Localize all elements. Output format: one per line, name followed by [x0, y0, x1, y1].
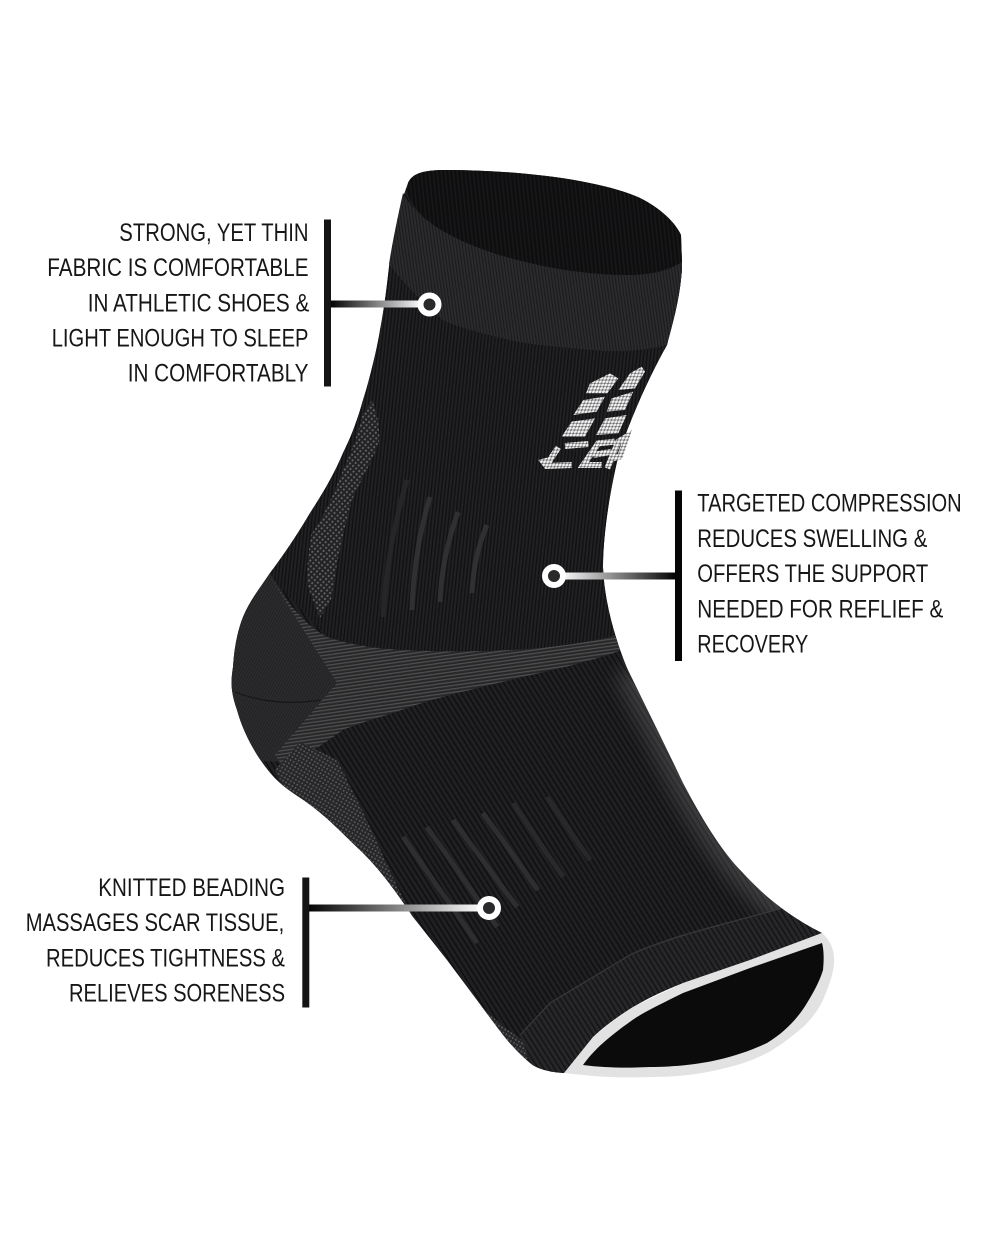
callout connector	[560, 572, 675, 580]
callout text: REDUCES SWELLING &	[697, 525, 928, 553]
toe opening white rim	[564, 933, 834, 1077]
callout text: IN ATHLETIC SHOES &	[88, 290, 310, 318]
callout: targeted compression	[545, 490, 962, 661]
callout text: IN COMFORTABLY	[128, 360, 309, 388]
callout text: KNITTED BEADING	[98, 874, 285, 902]
toe seam	[520, 908, 783, 1035]
speckled sole edge	[275, 742, 530, 1075]
compression sock illustration	[200, 170, 834, 1080]
callout text	[26, 874, 285, 1007]
callout text: STRONG, YET THIN	[119, 219, 308, 247]
speckled achilles panel	[307, 400, 379, 618]
toe opening interior	[583, 943, 824, 1068]
leg fabric	[268, 251, 682, 652]
callout connector	[331, 300, 423, 308]
sock foot fabric	[232, 170, 822, 1073]
top band	[389, 193, 682, 351]
foot fabric beading	[403, 797, 590, 943]
callout text: RELIEVES SORENESS	[69, 979, 285, 1007]
heel panel	[232, 573, 336, 762]
callout text: OFFERS THE SUPPORT	[697, 560, 928, 588]
callout: knitted beading	[26, 874, 498, 1008]
callout marker	[480, 899, 498, 917]
toe cuff	[520, 908, 830, 1080]
callout text: RECOVERY	[697, 630, 809, 658]
callout: strong yet thin fabric	[47, 219, 439, 388]
callout marker	[545, 567, 563, 585]
callout text: LIGHT ENOUGH TO SLEEP	[52, 324, 308, 352]
logo upper blocks	[586, 373, 618, 393]
sock top opening	[407, 170, 682, 275]
callout bracket bar	[324, 220, 331, 386]
callout marker	[420, 296, 438, 314]
callout bracket bar	[302, 878, 309, 1008]
callout text: MASSAGES SCAR TISSUE,	[26, 909, 284, 937]
ankle fabric beading	[383, 480, 487, 617]
callout bracket bar	[675, 490, 682, 661]
logo wordmark	[543, 437, 627, 468]
callout text: REDUCES TIGHTNESS &	[46, 944, 285, 972]
callout connector	[309, 904, 483, 912]
callout text: FABRIC IS COMFORTABLE	[47, 254, 309, 282]
woven arch band	[270, 577, 630, 770]
heel seam	[235, 692, 320, 702]
callout text	[697, 490, 962, 658]
foot edge sheen	[615, 666, 781, 914]
callout text	[47, 219, 310, 388]
CEP logo	[543, 367, 645, 468]
callout text: NEEDED FOR REFLIEF &	[697, 595, 944, 623]
sock clipped regions	[200, 250, 830, 1080]
